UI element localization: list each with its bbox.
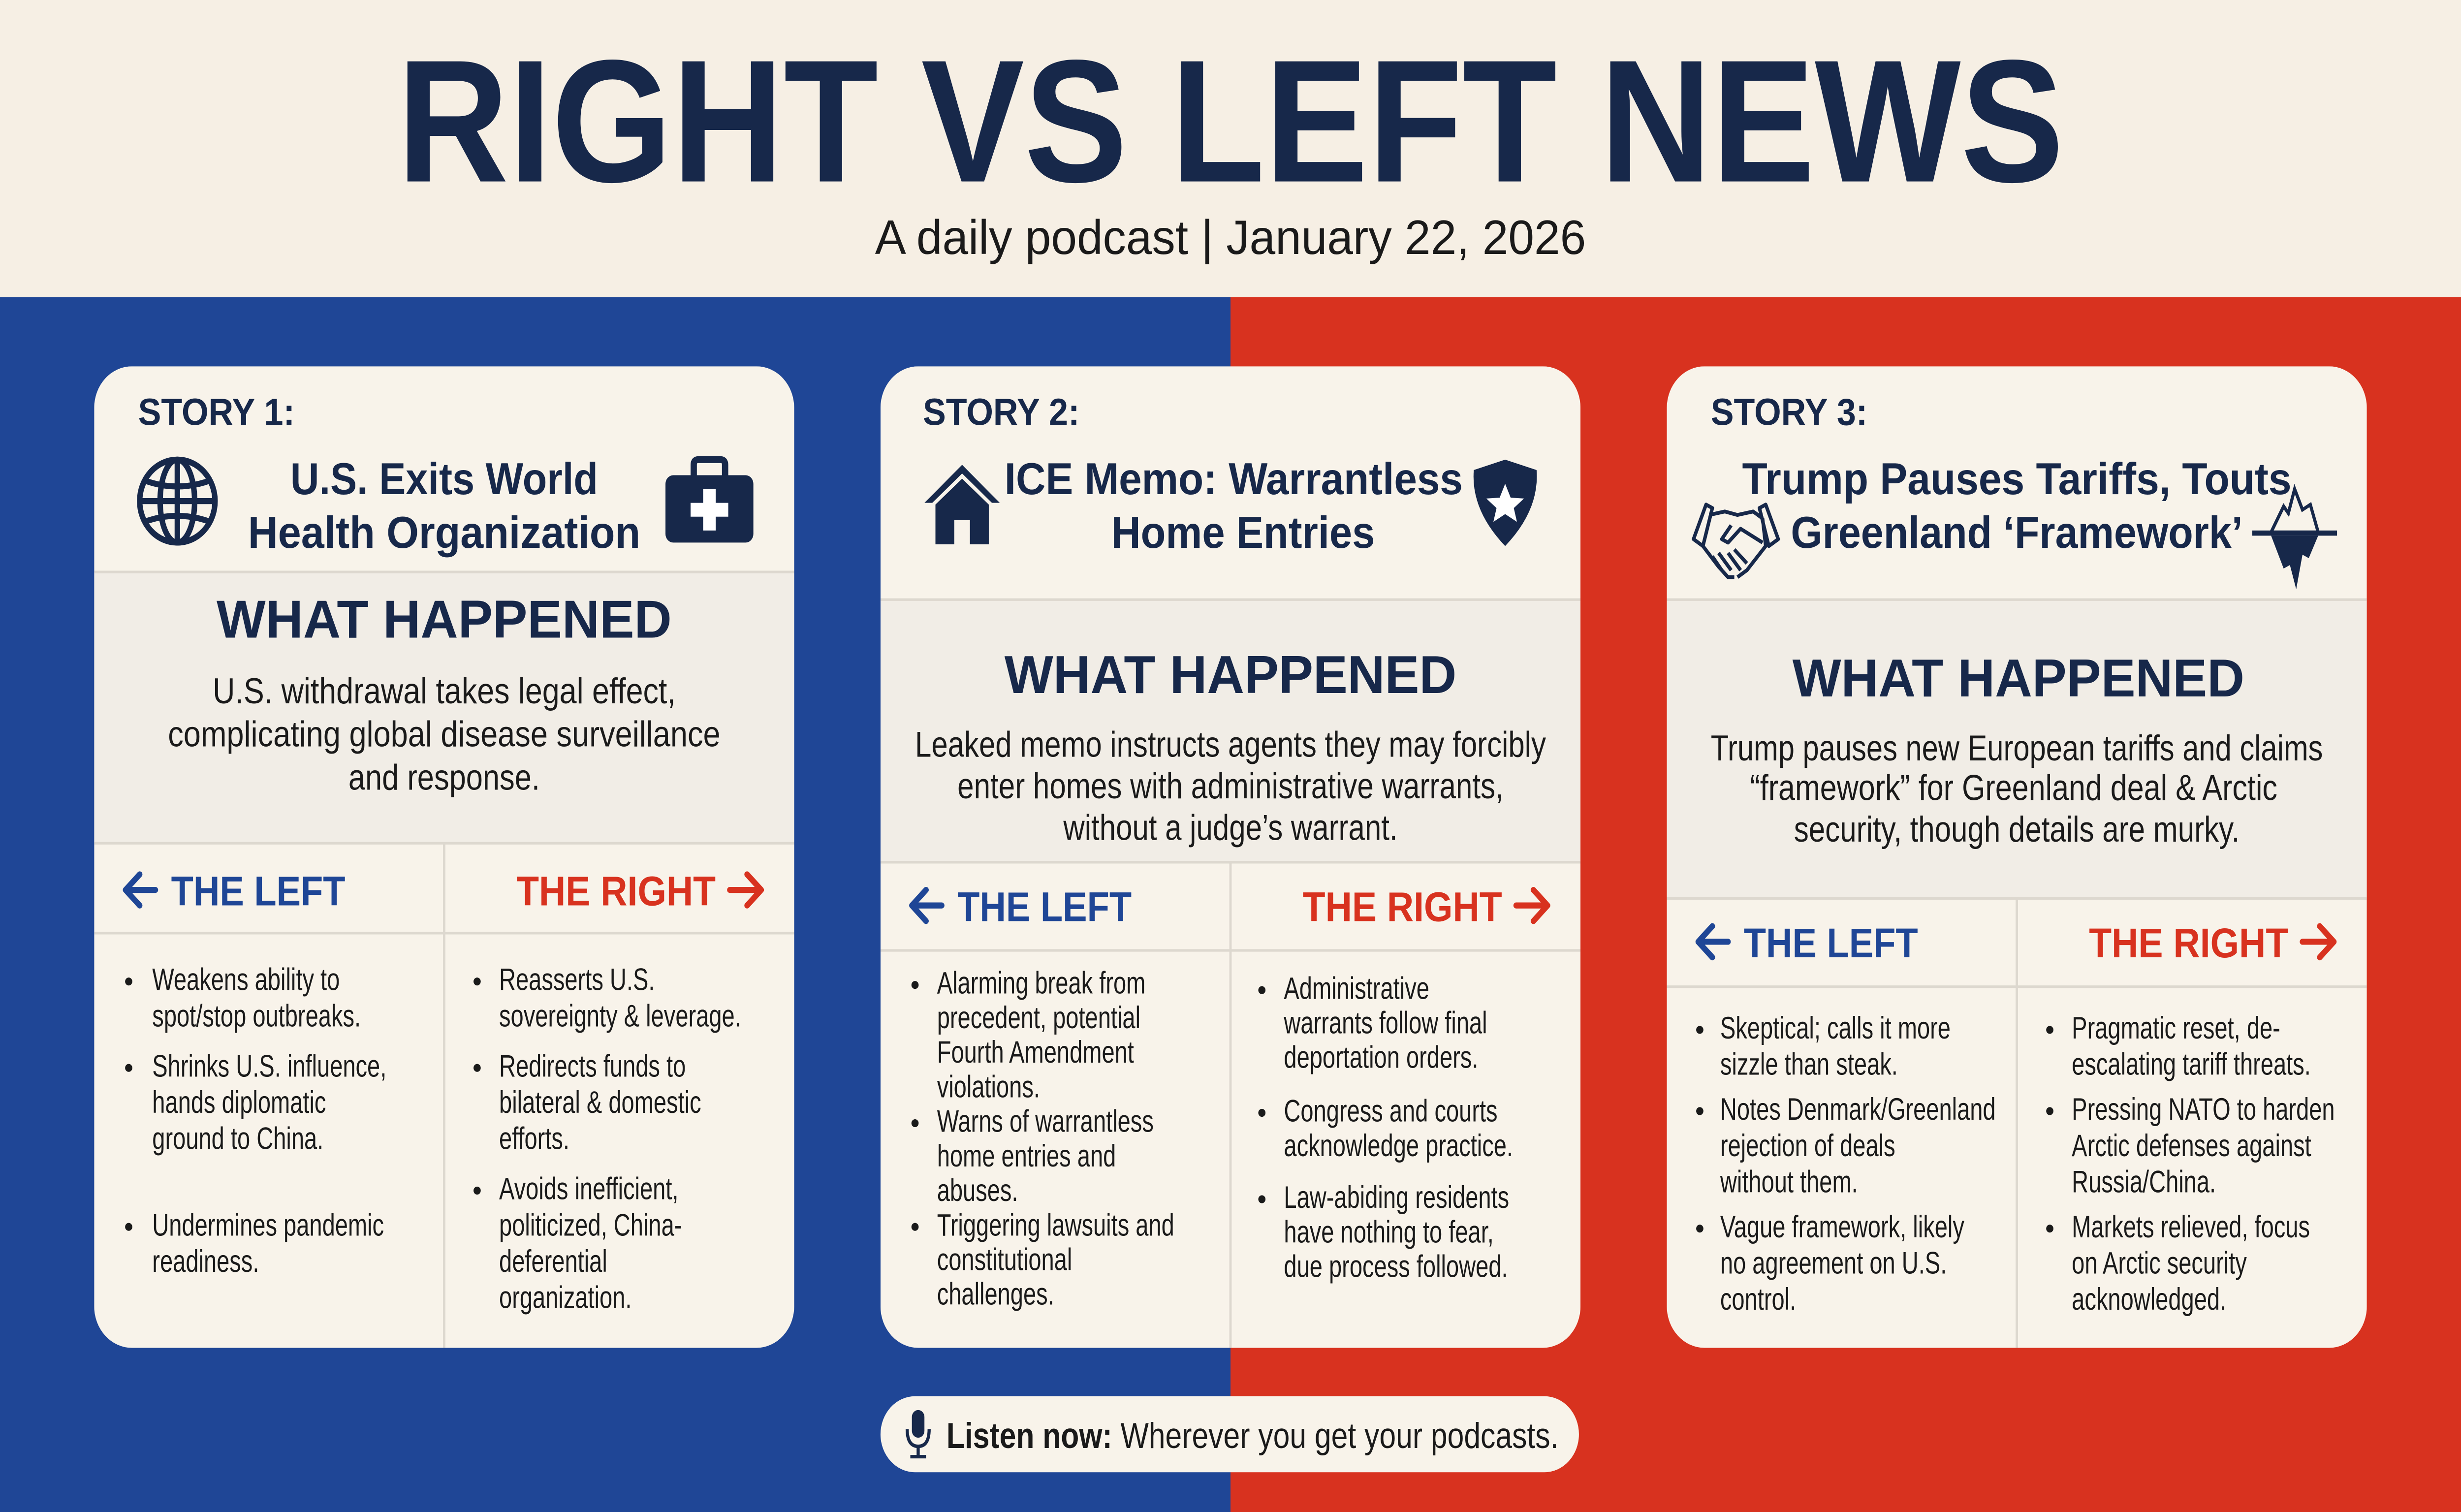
- the right label 1: THE RIGHT: [516, 868, 716, 915]
- right bullets 2: deportation orders.: [1284, 1040, 1478, 1074]
- the right label 3: THE RIGHT: [2089, 920, 2288, 967]
- right bullets 1: deferential: [499, 1244, 607, 1279]
- left bullets 1: readiness.: [152, 1244, 259, 1279]
- right bullets 3: on Arctic security: [2072, 1246, 2247, 1280]
- right bullets 3: Pragmatic reset, de-: [2072, 1010, 2280, 1045]
- left bullets 1: Shrinks U.S. influence,: [152, 1049, 386, 1083]
- what happened text 1: complicating global disease surveillance: [168, 714, 721, 754]
- right bullets 3: Markets relieved, focus: [2072, 1209, 2310, 1244]
- heading: what happened 3: WHAT HAPPENED: [1793, 649, 2244, 708]
- the left label 3: THE LEFT: [1744, 920, 1918, 967]
- heading: what happened 1: WHAT HAPPENED: [217, 590, 672, 650]
- left bullets 2: precedent, potential: [937, 1000, 1140, 1035]
- left bullets 3: Vague framework, likely: [1720, 1209, 1964, 1244]
- subtitle: A daily podcast | January 22, 2026: [875, 210, 1586, 264]
- left bullets 1: ground to China.: [152, 1121, 323, 1156]
- left bullets 3: rejection of deals: [1720, 1128, 1895, 1163]
- background: red right half: [1230, 297, 2461, 1512]
- story label 2: STORY 2:: [923, 391, 1079, 433]
- right bullets 2: acknowledge practice.: [1284, 1128, 1513, 1163]
- icon: house: [924, 465, 1000, 544]
- left bullets 2: abuses.: [937, 1173, 1018, 1208]
- story title 3: Trump Pauses Tariffs, Touts: [1742, 454, 2292, 504]
- right bullets 2: Congress and courts: [1284, 1094, 1498, 1128]
- story title 2: Home Entries: [1111, 507, 1375, 558]
- left bullets 2: Triggering lawsuits and: [937, 1208, 1174, 1242]
- left bullets 2: constitutional: [937, 1242, 1072, 1277]
- right bullets 1: sovereignty & leverage.: [499, 999, 741, 1033]
- left bullets 1: spot/stop outbreaks.: [152, 999, 361, 1033]
- what happened text 1: U.S. withdrawal takes legal effect,: [213, 670, 676, 711]
- right bullets 1: efforts.: [499, 1121, 569, 1156]
- right bullets 2: have nothing to fear,: [1284, 1215, 1494, 1249]
- story title 3: [1742, 454, 2292, 558]
- the right label 2: THE RIGHT: [1303, 884, 1502, 930]
- left bullets 3: Notes Denmark/Greenland: [1720, 1092, 1996, 1127]
- left bullets 2: Fourth Amendment: [937, 1035, 1134, 1070]
- left bullets 1: [125, 962, 386, 1279]
- the left label 1: THE LEFT: [171, 868, 346, 915]
- what happened text 2: Leaked memo instructs agents they may forcibly: [915, 724, 1546, 764]
- story title 1: Health Organization: [248, 507, 640, 558]
- right bullets 2: Law-abiding residents: [1284, 1180, 1509, 1215]
- right bullets 2: Administrative: [1284, 971, 1429, 1006]
- left bullets 2: violations.: [937, 1070, 1040, 1104]
- what happened text 3: Trump pauses new European tariffs and claims: [1711, 727, 2323, 768]
- right bullets 1: Redirects funds to: [499, 1049, 686, 1083]
- what happened text 1: [168, 670, 721, 797]
- what happened text 3: security, though details are murky.: [1794, 809, 2240, 849]
- left bullets 1: Undermines pandemic: [152, 1208, 384, 1242]
- title: RIGHT VS LEFT NEWS: [397, 23, 2064, 219]
- left bullets 3: Skeptical; calls it more: [1720, 1010, 1951, 1045]
- listen text: Listen now: Wherever you get your podcasts.: [947, 1415, 1558, 1456]
- left bullets 2: challenges.: [937, 1277, 1054, 1311]
- story title 2: ICE Memo: Warrantless: [1005, 454, 1463, 504]
- right bullets 3: Russia/China.: [2072, 1165, 2216, 1199]
- panel: story 1: [94, 366, 794, 1348]
- callout: listen now pill: [881, 1396, 1579, 1472]
- story label 1: STORY 1:: [138, 391, 295, 433]
- right bullets 3: escalating tariff threats.: [2072, 1047, 2311, 1081]
- icon: police badge: [1474, 460, 1537, 546]
- panel: story 2: [881, 366, 1580, 1348]
- the left label 2: THE LEFT: [957, 884, 1132, 930]
- story title 1: [248, 454, 640, 558]
- left bullets 3: no agreement on U.S.: [1720, 1246, 1947, 1280]
- right bullets 3: Arctic defenses against: [2072, 1128, 2311, 1163]
- icon: globe: [140, 460, 215, 542]
- left bullets 1: hands diplomatic: [152, 1085, 326, 1120]
- icon: iceberg: [2252, 489, 2337, 589]
- right bullets 3: acknowledged.: [2072, 1282, 2226, 1317]
- left bullets 3: without them.: [1720, 1165, 1858, 1199]
- right bullets 1: politicized, China-: [499, 1208, 682, 1242]
- what happened text 3: “framework” for Greenland deal & Arctic: [1750, 767, 2277, 808]
- left bullets 3: control.: [1720, 1282, 1796, 1317]
- right bullets 1: bilateral & domestic: [499, 1085, 701, 1120]
- left bullets 1: Weakens ability to: [152, 962, 340, 997]
- right bullets 1: Avoids inefficient,: [499, 1171, 679, 1206]
- icon: handshake: [1694, 504, 1778, 577]
- right bullets 2: [1258, 971, 1513, 1284]
- left bullets 2: Warns of warrantless: [937, 1104, 1154, 1138]
- right bullets 1: organization.: [499, 1280, 631, 1315]
- right bullets 3: Pressing NATO to harden: [2072, 1092, 2335, 1127]
- story title 3: Greenland ‘Framework’: [1791, 507, 2243, 558]
- right bullets 2: warrants follow final: [1284, 1006, 1487, 1040]
- left bullets 2: home entries and: [937, 1138, 1116, 1173]
- panel: story 3: [1667, 366, 2367, 1348]
- left bullets 3: sizzle than steak.: [1720, 1047, 1898, 1081]
- what happened text 1: and response.: [348, 756, 540, 797]
- left bullets 2: [912, 966, 1174, 1311]
- icon: medical kit: [665, 460, 754, 542]
- right bullets 1: Reasserts U.S.: [499, 962, 655, 997]
- story label 3: STORY 3:: [1711, 391, 1867, 433]
- background: blue left half: [0, 297, 1230, 1512]
- left bullets 3: [1696, 1010, 1996, 1317]
- heading: what happened 2: WHAT HAPPENED: [1005, 645, 1456, 705]
- right bullets 2: due process followed.: [1284, 1249, 1508, 1284]
- story title 1: U.S. Exits World: [290, 454, 598, 504]
- what happened text 2: enter homes with administrative warrants,: [957, 765, 1504, 806]
- left bullets 2: Alarming break from: [937, 966, 1145, 1000]
- what happened text 2: without a judge’s warrant.: [1063, 807, 1398, 848]
- story title 2: [1005, 454, 1463, 558]
- what happened text 2: [915, 724, 1546, 848]
- what happened text 3: [1711, 727, 2323, 849]
- right bullets 3: [2046, 1010, 2335, 1317]
- right bullets 1: [473, 962, 741, 1315]
- icon: microphone: [907, 1410, 929, 1457]
